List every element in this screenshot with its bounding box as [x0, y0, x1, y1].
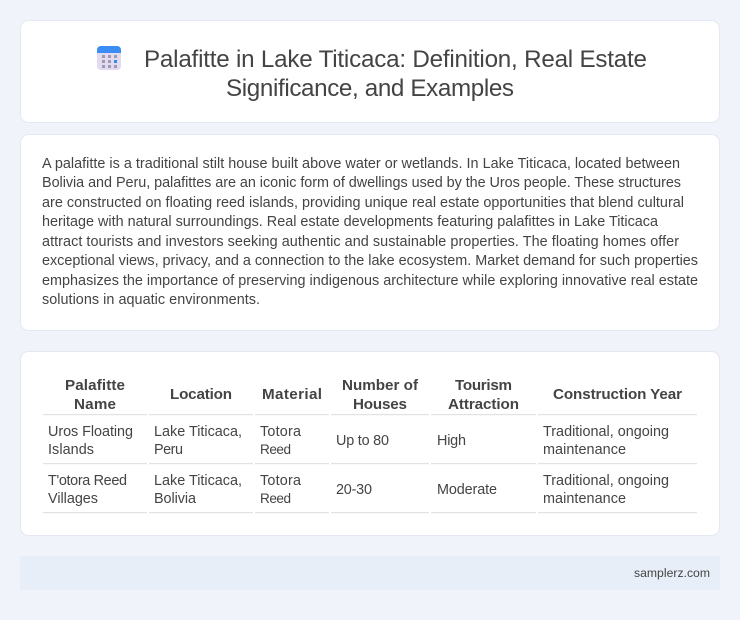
table row: T'otora Reed Villages: 20-30: [336, 482, 372, 498]
table header row: Houses: [353, 396, 407, 413]
table row: Uros Floating Islands: maintenance: [543, 442, 626, 458]
table header row: Number of: [342, 377, 419, 394]
panel: description: [20, 134, 720, 330]
table header row: [65, 377, 682, 413]
table row: T'otora Reed Villages: Moderate: [437, 482, 497, 498]
table header row: Material: [262, 386, 322, 403]
table row: Uros Floating Islands: Totora: [260, 424, 301, 440]
table header row: Tourism: [455, 377, 512, 394]
table header row: Construction Year: [553, 386, 682, 403]
text block: definition paragraph: attract tourists and investors seeking authentic and sustainable properties. The floating homes offer: [42, 234, 679, 250]
table row: T'otora Reed Villages: Totora: [260, 473, 301, 489]
table row: Uros Floating Islands: [48, 424, 669, 458]
table row: T'otora Reed Villages: T'otora Reed: [48, 473, 127, 489]
table row: T'otora Reed Villages: maintenance: [543, 491, 626, 507]
panel: title card: [20, 20, 720, 122]
text block: definition paragraph: [42, 156, 698, 308]
table row: Uros Floating Islands: Islands: [48, 442, 94, 458]
table row: T'otora Reed Villages: Reed: [260, 491, 291, 506]
table row: T'otora Reed Villages: Villages: [48, 491, 98, 507]
table row: T'otora Reed Villages: [48, 473, 669, 507]
table row: Uros Floating Islands: Uros Floating: [48, 424, 133, 440]
table row: T'otora Reed Villages: Lake Titicaca,: [154, 473, 242, 489]
footer: [20, 556, 720, 590]
table row: Uros Floating Islands: Lake Titicaca,: [154, 424, 242, 440]
table header row: Name: [74, 396, 116, 413]
icon: calendar: [97, 46, 121, 70]
table header row: Attraction: [448, 396, 519, 413]
table header row: Location: [170, 386, 232, 403]
table row: Uros Floating Islands: Up to 80: [336, 433, 389, 449]
title: Palafitte in Lake Titicaca: Definition, Real Estate: [144, 46, 647, 73]
text block: definition paragraph: exceptional views, privacy, and a connection to the lake ecosystem. Market demand for such properties: [42, 253, 698, 269]
text block: definition paragraph: Bolivia and Peru, palafittes are an iconic form of dwellings used by the Uros people. These structures: [42, 175, 681, 191]
table row: Uros Floating Islands: Reed: [260, 442, 291, 457]
title: Significance, and Examples: [226, 75, 514, 102]
text block: definition paragraph: are constructed on floating reed islands, providing unique real estate opportunities that blend cultural: [42, 195, 684, 211]
table header row: Palafitte: [65, 377, 125, 394]
table row: T'otora Reed Villages: Bolivia: [154, 491, 196, 507]
text block: definition paragraph: solutions in aquatic environments.: [42, 292, 260, 308]
title: [144, 46, 647, 102]
table row: Uros Floating Islands: Peru: [154, 442, 183, 458]
panel: table card: [20, 352, 720, 536]
table row: T'otora Reed Villages: Traditional, ongoing: [543, 473, 669, 489]
footer: samplerz.com: [634, 566, 710, 580]
table row: Uros Floating Islands: High: [437, 433, 466, 449]
text block: definition paragraph: emphasizes the importance of preserving indigenous architecture while exploring innovative real estate: [42, 273, 698, 289]
text block: definition paragraph: A palafitte is a traditional stilt house built above water or wetlands. In Lake Titicaca, located between: [42, 156, 680, 172]
table row: Uros Floating Islands: Traditional, ongoing: [543, 424, 669, 440]
text block: definition paragraph: heritage with natural surroundings. Real estate developments featuring palafittes in Lake Titicaca: [42, 214, 658, 230]
